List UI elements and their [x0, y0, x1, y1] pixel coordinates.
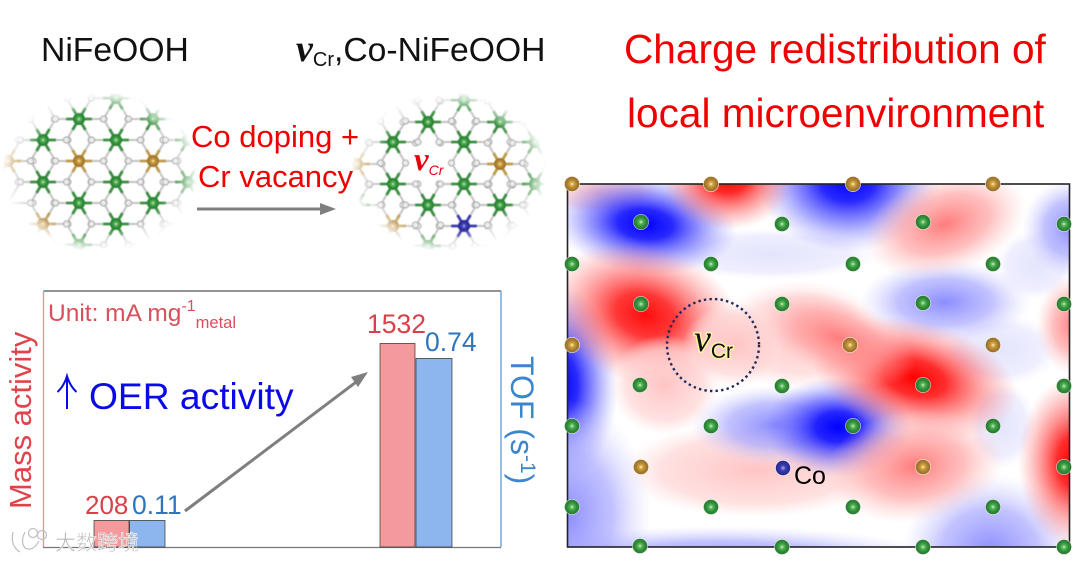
- unit label: Unit: mA mg: [48, 300, 181, 327]
- green atoms: [564, 214, 1072, 555]
- unit label: metal: [196, 314, 236, 332]
- light tints: [568, 184, 1066, 546]
- title: vCr,Co-NiFeOOH: Cr: [313, 49, 334, 71]
- label: Co doping + Cr vacancy: [191, 119, 359, 194]
- lattice: NiFeOOH: [3, 94, 196, 250]
- label: Co: Co: [794, 462, 826, 490]
- value: 0.74: 0.74: [425, 327, 477, 357]
- blue lobes: [568, 184, 1069, 546]
- axis title: TOF: -1: [516, 455, 539, 474]
- heading: charge redistribution: [624, 26, 1047, 136]
- watermark: [12, 527, 139, 557]
- chart: mass activity and TOF: [3, 291, 540, 548]
- title: vCr,Co-NiFeOOH: ,Co-NiFeOOH: [334, 31, 546, 69]
- heading: charge redistribution: local microenvironment: [627, 90, 1044, 136]
- arrow: doping transition: [197, 203, 336, 215]
- label: vCr in map: ν: [694, 318, 711, 360]
- heading: charge redistribution: Charge redistribution of: [624, 26, 1047, 72]
- title: NiFeOOH: NiFeOOH: [41, 31, 189, 69]
- gold atoms: [564, 176, 1001, 475]
- label: Co doping + Cr vacancy: Co doping +: [191, 119, 359, 154]
- value: 208: 208: [85, 490, 128, 520]
- map: charge density: [564, 176, 1072, 555]
- chart frame: [43, 291, 501, 548]
- vacancy label in lattice: ν: [414, 142, 429, 178]
- title: vCr,Co-NiFeOOH: ν: [296, 28, 314, 70]
- value: 1532: 1532: [367, 309, 426, 339]
- vacancy label in lattice: Cr: [429, 162, 445, 178]
- axis title: TOF: TOF (s: [504, 356, 540, 455]
- axis title: mass activity: Mass activity: [3, 331, 38, 509]
- value: 0.11: 0.11: [132, 490, 182, 520]
- arrow: activity increase: [184, 372, 368, 512]
- label: vCr in map: Cr: [711, 340, 733, 363]
- bars: high activity: [380, 344, 452, 547]
- watermark: 大数跨境: [55, 527, 139, 557]
- axis title: TOF: ): [504, 474, 540, 484]
- callout: OER activity: OER activity: [89, 375, 294, 417]
- icon: up arrow: [58, 376, 76, 409]
- lattice: vCr,Co-NiFeOOH: [352, 94, 545, 250]
- bars: low activity: [94, 520, 165, 547]
- vacancy circle: [667, 299, 759, 391]
- plot border: [568, 184, 1070, 547]
- red lobes: [568, 184, 1069, 541]
- cobalt atom: [775, 460, 791, 476]
- label: Co doping + Cr vacancy: Cr vacancy: [198, 159, 354, 194]
- unit label: -1: [181, 298, 196, 315]
